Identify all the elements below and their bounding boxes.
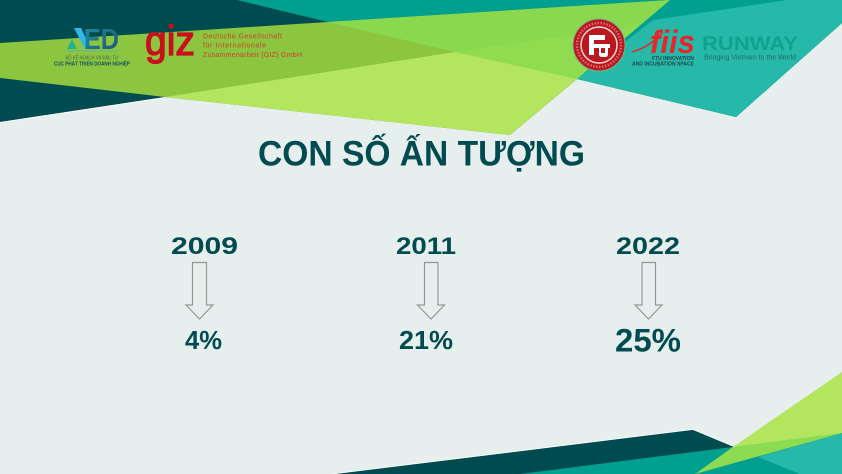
value 25%: 25% (615, 322, 681, 358)
arrow down (186, 262, 213, 319)
logo: FIIS: FTU INNOVATION (652, 56, 694, 62)
title: CON SỐ ẤN TƯỢNG (258, 134, 585, 174)
logo: RUNWAY: Bringing Vietnam to the World (704, 54, 796, 62)
logo: AED (54, 24, 130, 68)
logo: giz: Zusammenarbeit (GIZ) GmbH (203, 52, 302, 59)
logo: RUNWAY: RUNWAY (702, 34, 798, 55)
logo: giz (145, 17, 302, 64)
top banner geometric shapes (0, 0, 842, 135)
arrow down (418, 262, 444, 319)
logo: FTU seal (573, 19, 625, 71)
logo: FIIS: fiis (650, 24, 695, 60)
logo: giz: Deutsche Gesellschaft (203, 34, 282, 40)
arrow down (635, 262, 662, 319)
value 21%: 21% (399, 325, 453, 355)
logo: AED: CỤC PHÁT TRIỂN DOANH NGHIỆP (54, 60, 130, 68)
value 4%: 4% (185, 325, 222, 355)
bottom geometric shapes (316, 372, 842, 474)
logo: AED: BỘ KẾ HOẠCH VÀ ĐẦU TƯ (66, 54, 119, 62)
year 2011: 2011 (396, 233, 456, 260)
logo: AED: ED (84, 24, 119, 56)
year 2022: 2022 (616, 233, 680, 260)
logo: FIIS (632, 24, 695, 68)
column: 2011 (396, 233, 456, 355)
logo: giz: für Internationale (203, 42, 266, 50)
column: 2022 (615, 233, 681, 358)
logo: FIIS: AND INCUBATION SPACE (632, 62, 695, 68)
column: 2009 (171, 233, 238, 355)
year 2009: 2009 (171, 233, 238, 260)
logo: giz: giz (145, 17, 195, 64)
logo: RUNWAY (702, 34, 798, 62)
